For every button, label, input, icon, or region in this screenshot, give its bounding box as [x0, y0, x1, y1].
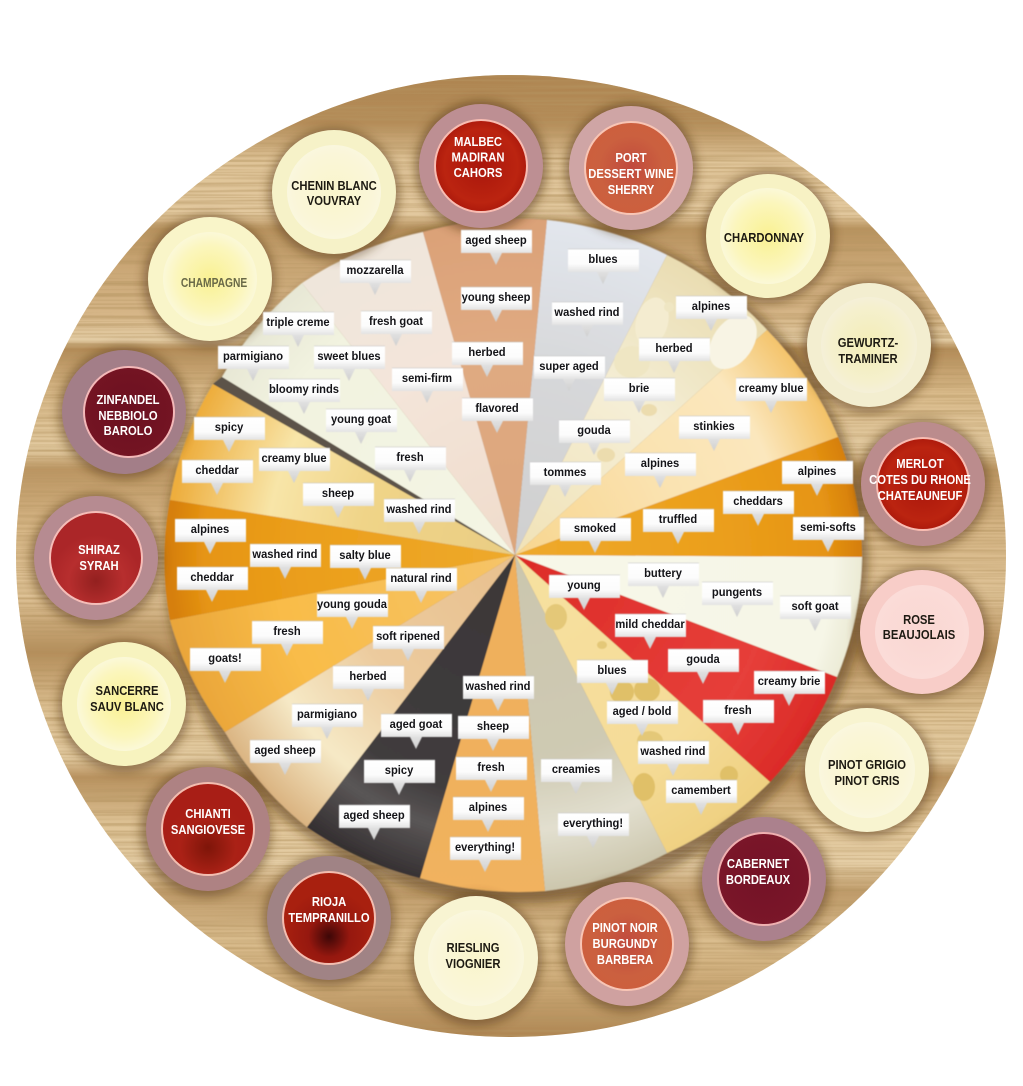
label: creamy blue — [259, 448, 330, 483]
label: spicy — [364, 760, 435, 795]
label: mozzarella: mozzarella — [347, 265, 404, 277]
label: cheddars: cheddars — [733, 496, 783, 508]
label: blues — [568, 248, 639, 284]
label: gouda: gouda — [686, 654, 720, 666]
label: creamy blue — [736, 378, 807, 413]
wedge: tan washed rind group — [420, 555, 545, 892]
label: aged sheep — [461, 230, 532, 265]
wine plate: Rose Beaujolais: ROSE — [903, 612, 935, 627]
label: alpines: alpines — [469, 802, 507, 814]
label: alpines — [625, 452, 696, 488]
wine plate: Chianti Sangiovese: CHIANTI — [185, 806, 231, 821]
wine plate: Rose Beaujolais — [856, 567, 988, 699]
label: creamy blue: creamy blue — [738, 383, 804, 395]
wine plate: Chianti Sangiovese: SANGIOVESE — [171, 822, 245, 837]
wine plate: Chenin Blanc Vouvray: CHENIN BLANC — [291, 178, 377, 193]
label: creamy brie — [754, 670, 825, 706]
label: washed rind: washed rind — [464, 681, 530, 693]
label: truffled: truffled — [659, 514, 697, 526]
cheese holes — [545, 294, 767, 801]
label: sheep — [303, 482, 374, 518]
wine plate: Gewurtztraminer: GEWURTZ- — [838, 335, 898, 350]
wine plate: Riesling Viognier: VIOGNIER — [446, 956, 501, 971]
wedge: aged sheep group — [423, 219, 547, 555]
label: alpines — [175, 518, 246, 554]
wine plate: Chenin Blanc Vouvray: VOUVRAY — [307, 193, 361, 208]
wine plate: Rioja Tempranillo: TEMPRANILLO — [288, 910, 370, 925]
wine plate: Zinfandel Nebbiolo Barolo — [58, 347, 190, 479]
label: soft goat: soft goat — [791, 601, 839, 613]
label: everything!: everything! — [455, 842, 515, 854]
label: fresh — [703, 700, 774, 735]
label: young sheep — [461, 286, 532, 322]
divider stripe — [213, 377, 515, 555]
label: mozzarella — [340, 260, 411, 295]
wine plate: Malbec Madiran Cahors — [415, 101, 547, 233]
wine plate: Pinot Grigio Pinot Gris: PINOT GRIS — [835, 773, 900, 788]
label: super aged: super aged — [539, 361, 599, 373]
wine plate: Port Dessert Wine Sherry: DESSERT WINE — [588, 166, 674, 181]
wine plate: Chenin Blanc Vouvray — [268, 128, 400, 260]
label: stinkies: stinkies — [693, 421, 735, 433]
label: soft goat — [780, 596, 851, 631]
wine plate: Port Dessert Wine Sherry — [565, 103, 697, 235]
label: triple creme — [263, 312, 334, 347]
wine plate: Pinot Noir Burgundy Barbera: BARBERA — [597, 952, 654, 967]
label: sheep: sheep — [322, 488, 354, 500]
wine plate: Champagne: CHAMPAGNE — [181, 277, 248, 290]
label: washed rind — [638, 740, 709, 776]
label: semi-softs — [793, 516, 864, 552]
wedge: creamies — [515, 555, 667, 891]
label: aged sheep — [339, 804, 410, 840]
label: sheep — [458, 716, 529, 751]
label: natural rind: natural rind — [390, 573, 452, 585]
wine plate: Pinot Noir Burgundy Barbera — [561, 880, 693, 1012]
label: washed rind: washed rind — [251, 549, 317, 561]
label: gouda: gouda — [577, 425, 611, 437]
label: goats! — [190, 648, 261, 683]
wine plate: Merlot Cotes du Rhone Chateauneuf: COTES DU RHONE — [869, 472, 971, 487]
wedge: red gouda group — [515, 555, 837, 782]
label: aged goat — [381, 714, 452, 749]
wedge: creamy blue group — [515, 330, 838, 555]
label: sweet blues — [314, 346, 385, 381]
label: fresh — [456, 756, 527, 792]
wine plate: Cabernet Bordeaux: CABERNET — [727, 856, 790, 871]
wine plate: Pinot Grigio Pinot Gris — [801, 705, 933, 837]
label: semi-firm — [392, 368, 463, 403]
label: camembert — [666, 780, 737, 815]
label: alpines: alpines — [641, 458, 679, 470]
label: tommes — [530, 462, 601, 497]
wine plate: Riesling Viognier — [410, 894, 542, 1026]
label: pungents: pungents — [712, 587, 762, 599]
label: herbed: herbed — [468, 347, 506, 359]
label: natural rind — [386, 568, 457, 603]
label: young goat — [326, 408, 397, 444]
label: washed rind — [384, 498, 455, 534]
label: alpines — [782, 460, 853, 496]
wine plate: Chardonnay: CHARDONNAY — [724, 230, 804, 245]
wine plate: Merlot Cotes du Rhone Chateauneuf: MERLOT — [896, 456, 944, 471]
cheese wheel pie chart — [164, 219, 868, 903]
label: soft ripened — [373, 626, 444, 661]
wine plate: Malbec Madiran Cahors: MADIRAN — [451, 150, 505, 165]
wedge: goats group — [170, 555, 515, 732]
label: fresh: fresh — [477, 762, 505, 774]
wine plate: Sancerre Sauv Blanc — [58, 640, 190, 772]
label: washed rind — [250, 544, 321, 579]
label: smoked: smoked — [574, 523, 616, 535]
wedge: blues group — [515, 220, 667, 555]
label: camembert: camembert — [671, 785, 731, 797]
label: pungents — [702, 582, 773, 617]
label: herbed — [639, 338, 710, 373]
label: cheddar — [177, 566, 248, 602]
wedge: yellow spicy group — [170, 384, 515, 555]
wine plate: Malbec Madiran Cahors: CAHORS — [454, 165, 502, 180]
label: creamies: creamies — [552, 764, 600, 776]
wine plate: Pinot Grigio Pinot Gris: PINOT GRIGIO — [828, 757, 906, 772]
label: herbed: herbed — [349, 671, 387, 683]
label: stinkies — [679, 416, 750, 451]
wine plate: Zinfandel Nebbiolo Barolo: NEBBIOLO — [98, 408, 158, 423]
label: mild cheddar: mild cheddar — [615, 619, 685, 631]
label: cheddars — [723, 490, 794, 526]
label: washed rind — [552, 302, 623, 337]
wine plate: Rioja Tempranillo: RIOJA — [312, 894, 347, 909]
label: alpines — [676, 296, 747, 331]
label: buttery: buttery — [644, 568, 682, 580]
wine plate: Malbec Madiran Cahors: MALBEC — [454, 134, 502, 149]
label: gouda — [668, 648, 739, 684]
label: cheddar: cheddar — [195, 465, 239, 477]
label: everything! — [558, 812, 629, 848]
label: tommes: tommes — [544, 467, 586, 479]
label: salty blue: salty blue — [339, 550, 391, 562]
label: aged goat: aged goat — [390, 719, 442, 731]
wine plate: Port Dessert Wine Sherry: SHERRY — [608, 182, 654, 197]
label: spicy: spicy — [215, 422, 244, 434]
wine plate: Chardonnay — [702, 171, 834, 303]
label: flavored: flavored — [475, 403, 519, 415]
label: fresh: fresh — [396, 452, 424, 464]
wine plate: Zinfandel Nebbiolo Barolo: ZINFANDEL — [96, 392, 160, 407]
wine plate: Merlot Cotes du Rhone Chateauneuf — [857, 419, 989, 551]
wine plate: Zinfandel Nebbiolo Barolo: BAROLO — [104, 423, 152, 438]
label: truffled — [643, 508, 714, 544]
wedge: black spicy group — [307, 555, 515, 878]
label: gouda — [559, 420, 630, 455]
label: spicy — [194, 416, 265, 452]
label: sheep: sheep — [477, 721, 509, 733]
wine plate: Pinot Noir Burgundy Barbera: PINOT NOIR — [592, 920, 658, 935]
wine plate: Gewurtztraminer — [803, 281, 935, 413]
label: creamies — [541, 758, 612, 794]
wine plate: Merlot Cotes du Rhone Chateauneuf: CHATEAUNEUF — [878, 488, 962, 503]
label: alpines: alpines — [191, 524, 229, 536]
label: goats!: goats! — [208, 653, 242, 665]
label: aged sheep — [250, 740, 321, 775]
label: super aged — [534, 356, 605, 391]
label: young sheep: young sheep — [462, 292, 530, 304]
wedge: soft goat group — [515, 555, 862, 677]
wine plate: Shiraz Syrah: SHIRAZ — [78, 542, 120, 557]
label: parmigiano: parmigiano — [223, 351, 283, 363]
label: fresh — [375, 446, 446, 482]
label: fresh: fresh — [724, 705, 752, 717]
wine plate: Chianti Sangiovese — [140, 765, 272, 897]
label: blues: blues — [588, 254, 618, 266]
wedge: swiss camembert group — [515, 555, 770, 853]
wedge: semi-firm whites — [302, 232, 515, 555]
label: alpines: alpines — [692, 301, 730, 313]
label: herbed — [452, 342, 523, 377]
label: salty blue — [330, 544, 401, 580]
label: blues: blues — [597, 665, 627, 677]
label: fresh — [252, 620, 323, 656]
label: aged / bold: aged / bold — [613, 706, 671, 718]
label: semi-firm: semi-firm — [402, 373, 452, 385]
label: soft ripened: soft ripened — [376, 631, 440, 643]
label: washed rind: washed rind — [385, 504, 451, 516]
label: alpines — [453, 796, 524, 832]
wine plate: Riesling Viognier: RIESLING — [446, 940, 500, 955]
wine plate: Rose Beaujolais: BEAUJOLAIS — [883, 627, 955, 642]
label: creamy blue: creamy blue — [261, 453, 327, 465]
label: everything! — [450, 836, 521, 872]
wine plate: Port Dessert Wine Sherry: PORT — [615, 150, 647, 165]
label: young: young — [567, 580, 601, 592]
wine plate: Pinot Noir Burgundy Barbera: BURGUNDY — [593, 936, 658, 951]
label: fresh goat: fresh goat — [369, 316, 423, 328]
wine plate: Cabernet Bordeaux — [698, 815, 830, 947]
label: spicy: spicy — [385, 765, 414, 777]
label: mild cheddar — [615, 614, 686, 649]
label: alpines: alpines — [798, 466, 836, 478]
label: bloomy rinds: bloomy rinds — [269, 384, 339, 396]
label: young goat: young goat — [331, 414, 391, 426]
wine plate: Shiraz Syrah: SYRAH — [79, 558, 119, 573]
label: parmigiano — [218, 346, 289, 381]
wine plate: Cabernet Bordeaux: BORDEAUX — [726, 872, 790, 887]
label: washed rind: washed rind — [639, 746, 705, 758]
label: cheddar — [182, 460, 253, 495]
label: herbed — [333, 666, 404, 701]
wine plate: Gewurtztraminer: TRAMINER — [838, 351, 898, 366]
label: flavored — [462, 398, 533, 433]
label: bloomy rinds — [269, 378, 340, 414]
label: fresh goat — [361, 310, 432, 346]
label: cheddar: cheddar — [190, 572, 234, 584]
label: aged / bold — [607, 700, 678, 736]
label: young — [549, 574, 620, 610]
label: semi-softs: semi-softs — [800, 522, 856, 534]
label: brie: brie — [629, 383, 650, 395]
wedge: pale fresh group — [222, 283, 515, 555]
label: brie — [604, 378, 675, 413]
label: herbed: herbed — [655, 343, 693, 355]
label: blues — [577, 660, 648, 695]
wine plate: Champagne — [143, 215, 275, 347]
label: everything!: everything! — [563, 818, 623, 830]
label: fresh: fresh — [273, 626, 301, 638]
label: creamy brie: creamy brie — [758, 676, 821, 688]
wedge: beige parmigiano group — [225, 555, 515, 827]
wedge: alpines and brie — [515, 255, 767, 555]
label: aged sheep: aged sheep — [465, 235, 527, 247]
wine plate: Sancerre Sauv Blanc: SANCERRE — [95, 683, 159, 698]
label: washed rind — [463, 676, 534, 711]
cheese labels — [175, 230, 864, 872]
wedge: deep orange alpines group — [164, 500, 515, 620]
label: washed rind: washed rind — [553, 307, 619, 319]
wine plate: Sancerre Sauv Blanc: SAUV BLANC — [90, 699, 164, 714]
wedge: cheddars group — [515, 437, 862, 557]
label: young gouda: young gouda — [317, 599, 388, 611]
label: buttery — [628, 562, 699, 598]
wine plate: Shiraz Syrah — [30, 494, 162, 626]
label: parmigiano: parmigiano — [297, 709, 357, 721]
label: triple creme: triple creme — [266, 317, 330, 329]
label: sweet blues: sweet blues — [317, 351, 381, 363]
wine plate: Rioja Tempranillo — [263, 854, 395, 986]
label: aged sheep: aged sheep — [343, 810, 405, 822]
label: aged sheep: aged sheep — [254, 745, 316, 757]
label: parmigiano — [292, 704, 363, 739]
label: smoked — [560, 518, 631, 553]
label: young gouda — [317, 594, 388, 629]
